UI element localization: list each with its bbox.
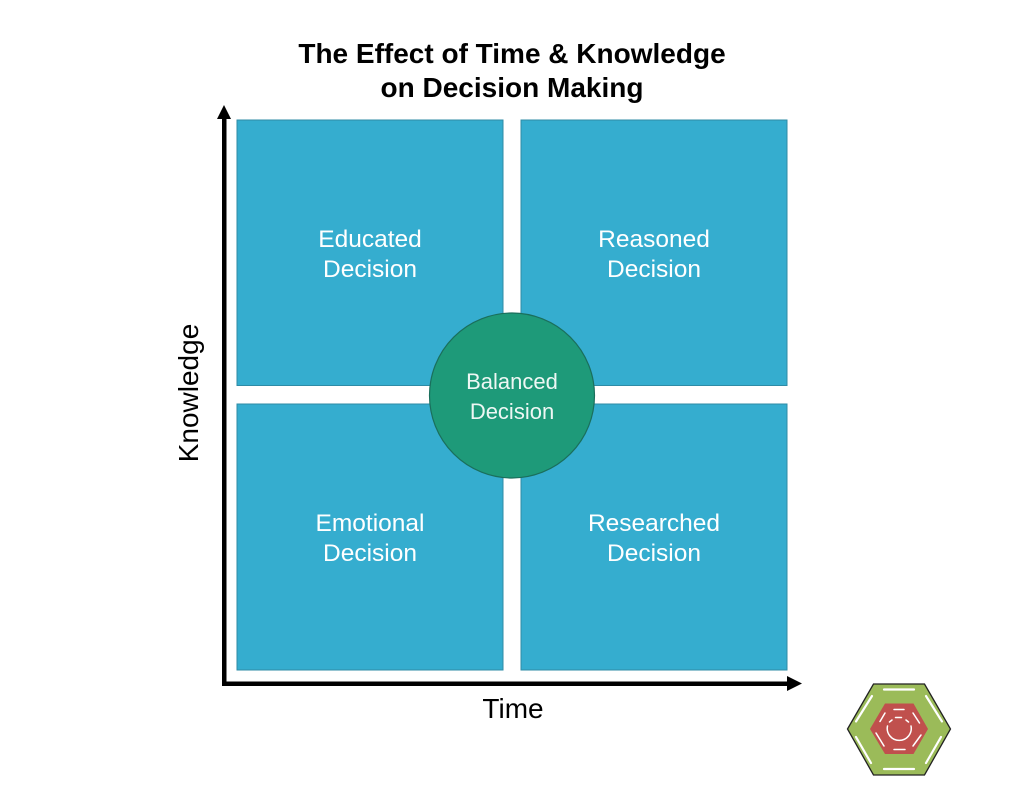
- axis label: knowledge: Knowledge: [173, 324, 204, 462]
- title: on Decision Making: [381, 72, 643, 103]
- panel: reasoned decision: Decision: [607, 256, 701, 283]
- icon: hexagon logo: [848, 684, 950, 775]
- panel: reasoned decision: [521, 120, 787, 386]
- panel: emotional decision: Emotional: [316, 510, 424, 537]
- panel: emotional decision: [237, 404, 503, 670]
- panel: emotional decision: Decision: [323, 540, 417, 567]
- circle: balanced decision: Balanced: [466, 369, 558, 394]
- arrow: time axis: [222, 676, 802, 691]
- arrow: knowledge axis: [217, 105, 231, 686]
- title: The Effect of Time & Knowledge: [298, 38, 726, 69]
- panel: researched decision: Decision: [607, 540, 701, 567]
- circle: balanced decision: [430, 313, 594, 478]
- title: [298, 38, 726, 103]
- panel: educated decision: Decision: [323, 256, 417, 283]
- panel: researched decision: [521, 404, 787, 670]
- panel: researched decision: Researched: [588, 510, 720, 537]
- panel: educated decision: [237, 120, 503, 386]
- panel: educated decision: Educated: [318, 226, 422, 253]
- circle: balanced decision: Decision: [470, 399, 554, 424]
- panel: reasoned decision: Reasoned: [598, 226, 710, 253]
- axis label: time: Time: [482, 693, 544, 724]
